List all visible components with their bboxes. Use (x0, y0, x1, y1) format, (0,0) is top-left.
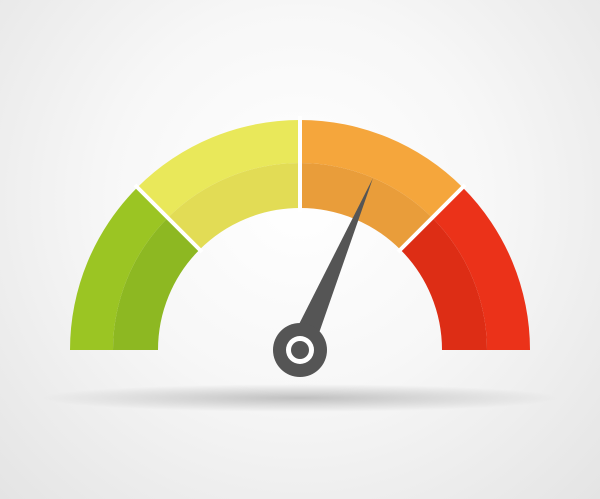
segment: yellow (137, 120, 300, 250)
hub (273, 323, 327, 377)
segment: red (400, 187, 530, 350)
segment: orange (300, 120, 463, 250)
segment: green (70, 187, 200, 350)
shadow (40, 384, 560, 412)
needle (289, 178, 373, 356)
